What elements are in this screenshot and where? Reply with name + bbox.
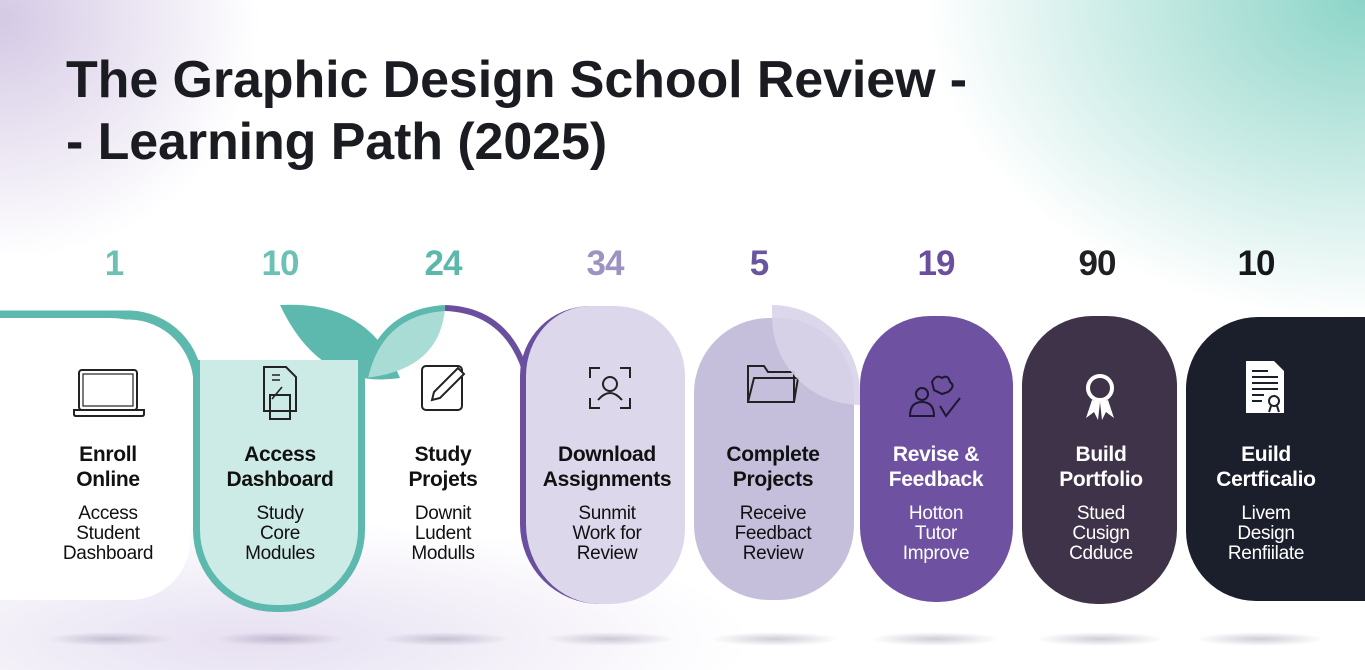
card 1: Enroll Online [0,318,190,600]
text: Complete Projects: Feedbact [735,523,811,544]
title [66,51,967,171]
text: Revise & Feedback: Revise & [893,443,979,466]
text: Build Portfolio: Cusign [1072,523,1130,544]
text: Study Projets: Downit [415,503,471,524]
text: Access Dashboard: Modules [245,543,315,564]
text: Revise & Feedback: Feedback [889,468,983,491]
step numbers: 10 [262,244,298,283]
text: Revise & Feedback: Tutor [915,523,957,544]
text: Euild Certficalio: Certficalio [1216,468,1316,491]
text: Euild Certficalio: Euild [1241,443,1291,466]
card 3: Study Projets [421,365,466,411]
text: Build Portfolio [1059,443,1143,564]
icon: certificate [1246,361,1284,413]
text: Build Portfolio: Stued [1077,503,1125,524]
text: Complete Projects: Receive [740,503,806,524]
step numbers: 5 [750,244,768,283]
text: Study Projets: Study [415,443,471,466]
text: Revise & Feedback: Hotton [909,503,963,524]
text: Enroll Online: Student [76,523,140,544]
text: Download Assignments [543,443,671,564]
text: Enroll Online: Online [76,468,140,491]
card 8: Euild Certficalio [1186,317,1365,601]
text: Access Dashboard: Core [260,523,300,544]
text: Study Projets: Ludent [415,523,471,544]
step numbers: 1 [105,244,123,283]
text: Study Projets: Projets [408,468,478,491]
card 6: Revise & Feedback [860,316,1013,602]
icon: laptop [73,369,145,417]
icon: face scan [589,367,631,409]
text: Study Projets [408,443,478,564]
text: Build Portfolio: Portfolio [1059,468,1143,491]
text: Build Portfolio: Build [1076,443,1126,466]
text: Access Dashboard: Access [244,443,316,466]
step numbers: 24 [425,244,461,283]
text: Study Projets: Modulls [411,543,475,564]
text: Access Dashboard: Study [256,503,304,524]
card 2: Access Dashboard [193,360,365,612]
text: Euild Certficalio [1216,443,1316,564]
step numbers [105,244,1274,283]
title: - Learning Path (2025) [66,113,607,171]
text: Access Dashboard: Dashboard [226,468,334,491]
title: The Graphic Design School Review - [66,51,967,109]
text: Complete Projects: Projects [733,468,813,491]
icon: folder [747,365,799,403]
step numbers: 19 [918,244,954,283]
text: Download Assignments: Work for [572,523,642,544]
icon: award ribbon [1086,374,1114,420]
text: Euild Certficalio: Design [1237,523,1295,544]
decorative overlap circle [772,305,860,405]
text: Euild Certficalio: Renfiilate [1228,543,1304,564]
text: Access Dashboard [226,443,334,564]
text: Download Assignments: Download [558,443,656,466]
icon: document with pencil [421,365,466,411]
text: Enroll Online: Access [78,503,138,524]
text: Enroll Online: Enroll [79,443,137,466]
icon: documents [263,366,297,420]
text: Complete Projects [726,443,820,564]
card 4: Download Assignments [520,306,685,604]
card 7: Build Portfolio [1022,316,1177,604]
text: Build Portfolio: Cdduce [1069,543,1133,564]
text: Complete Projects: Review [743,543,803,564]
text: Euild Certficalio: Livem [1241,503,1291,524]
text: Complete Projects: Complete [726,443,820,466]
step numbers: 10 [1238,244,1274,283]
text: Enroll Online [63,443,153,564]
step numbers: 34 [587,244,623,283]
text: Download Assignments: Sunmit [578,503,636,524]
text: Download Assignments: Review [577,543,637,564]
text: Download Assignments: Assignments [543,468,671,491]
card 5: Complete Projects [694,318,854,600]
text: Enroll Online: Dashboard [63,543,153,564]
icon: people check [909,376,961,418]
step numbers: 90 [1079,244,1115,283]
text: Revise & Feedback: Improve [903,543,969,564]
text: Revise & Feedback [889,443,984,564]
